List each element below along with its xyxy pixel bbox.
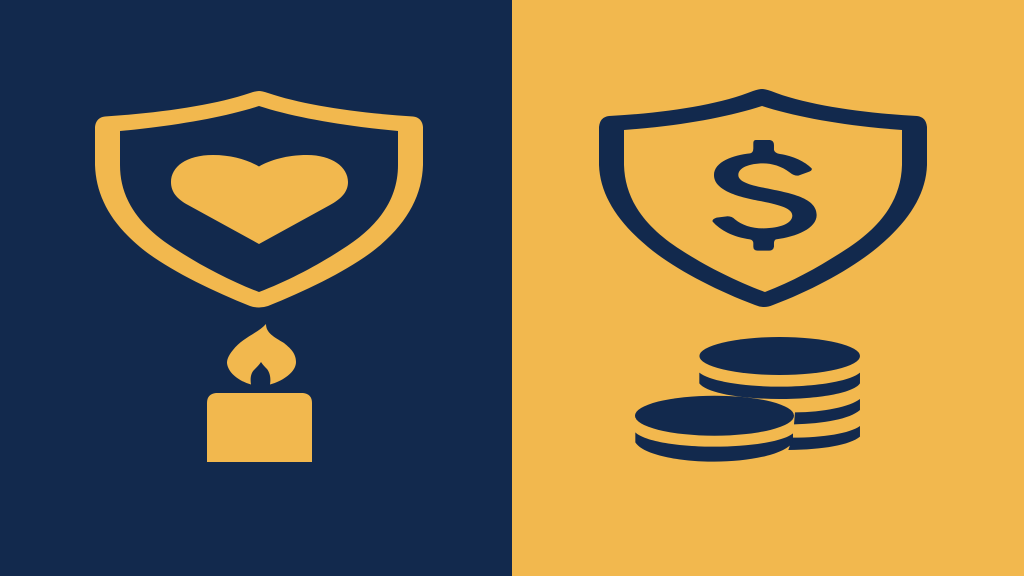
panel: gold right background: [512, 0, 1024, 576]
front coin edge: [635, 432, 793, 462]
candle body: [207, 393, 312, 462]
icon: coin stacks: [635, 337, 860, 462]
candle flame: [227, 324, 296, 384]
icon: dollar shield outline: [599, 89, 927, 307]
back stack top coin: [699, 337, 860, 375]
front coin: [635, 396, 794, 436]
panel: navy left background: [0, 0, 512, 576]
back stack coin edge 1: [699, 373, 860, 399]
icon: heart: [171, 155, 348, 244]
icon: candle: [207, 324, 312, 462]
icon: dollar sign: [712, 140, 817, 251]
back stack coin edge 2: [794, 399, 860, 424]
icon: heart shield outline: [95, 91, 423, 308]
back stack coin edge 3: [788, 426, 860, 450]
